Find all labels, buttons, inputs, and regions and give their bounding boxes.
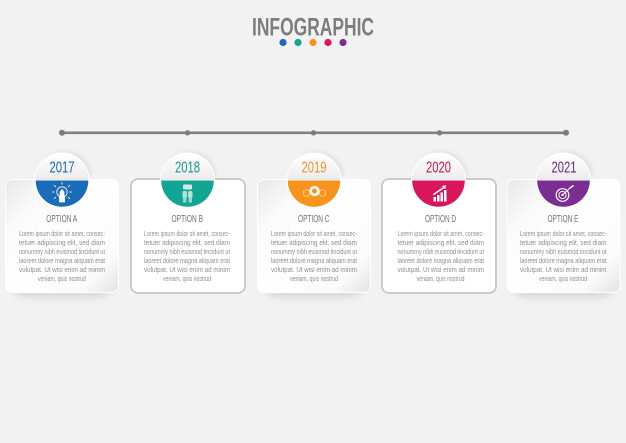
- icon: people: [182, 184, 192, 202]
- badge: 2018: 2018: [175, 160, 200, 176]
- badge: 2019: 2019: [302, 160, 326, 176]
- panel: option B: [131, 151, 245, 293]
- body text: [144, 229, 230, 283]
- body text: tetuer adipiscing elit, sed diam: [144, 238, 230, 247]
- body text: nonummy nibh euismod tincidunt ut: [19, 247, 105, 256]
- body text: nonummy nibh euismod tincidunt ut: [398, 247, 484, 256]
- body text: Lorem ipsum dolor sit amet, consec-: [271, 229, 357, 238]
- panel: option A: [6, 151, 118, 297]
- icon: target: [556, 186, 574, 201]
- body text: tetuer adipiscing elit, sed diam: [19, 238, 105, 247]
- body text: veniam, quis nostrud: [290, 274, 338, 283]
- body text: veniam, quis nostrud: [38, 274, 86, 283]
- body text: laoreet dolore magna aliquam erat: [144, 256, 230, 265]
- body text: laoreet dolore magna aliquam erat: [19, 256, 105, 265]
- body text: volutpat. Ut wisi enim ad minim: [144, 265, 230, 274]
- option label: OPTION B: [172, 214, 203, 225]
- icon: gears: [303, 187, 326, 196]
- badge: 2018: [160, 152, 215, 208]
- body text: [520, 229, 607, 283]
- title colour dots: [279, 39, 347, 46]
- body text: volutpat. Ut wisi enim ad minim: [398, 265, 484, 274]
- body text: volutpat. Ut wisi enim ad minim: [19, 265, 105, 274]
- option label: OPTION D: [425, 214, 456, 225]
- body text: veniam, quis nostrud: [163, 274, 211, 283]
- title: INFOGRAPHIC: [252, 14, 374, 42]
- panel: option D: [382, 151, 496, 293]
- body text: volutpat. Ut wisi enim ad minim: [520, 265, 606, 274]
- body text: laoreet dolore magna aliquam erat: [398, 256, 484, 265]
- body text: [19, 229, 105, 283]
- body text: Lorem ipsum dolor sit amet, consec-: [19, 229, 105, 238]
- badge: 2020: 2020: [426, 160, 451, 176]
- body text: [398, 229, 484, 283]
- body text: veniam, quis nostrud: [416, 274, 464, 283]
- badge: 2021: [536, 152, 591, 208]
- icon: bar chart: [433, 185, 446, 202]
- body text: tetuer adipiscing elit, sed diam: [398, 238, 484, 247]
- body text: [271, 229, 357, 283]
- body text: tetuer adipiscing elit, sed diam: [520, 238, 606, 247]
- body text: volutpat. Ut wisi enim ad minim: [271, 265, 357, 274]
- body text: Lorem ipsum dolor sit amet, consec-: [144, 229, 230, 238]
- body text: veniam, quis nostrud: [539, 274, 587, 283]
- option label: OPTION C: [298, 214, 330, 225]
- body text: Lorem ipsum dolor sit amet, consec-: [398, 229, 484, 238]
- option label: OPTION E: [548, 214, 579, 225]
- badge: 2019: [286, 152, 342, 208]
- timeline: [59, 130, 569, 136]
- icon: light bulb: [52, 182, 72, 202]
- option label: OPTION A: [46, 214, 78, 225]
- panel: option E: [507, 151, 620, 297]
- body text: nonummy nibh euismod tincidunt ut: [271, 247, 357, 256]
- badge: 2020: [411, 152, 466, 208]
- badge: 2017: 2017: [50, 160, 74, 176]
- body text: tetuer adipiscing elit, sed diam: [271, 238, 357, 247]
- badge: 2017: [34, 152, 90, 208]
- panel: option C: [258, 151, 370, 297]
- body text: nonummy nibh euismod tincidunt ut: [144, 247, 230, 256]
- body text: laoreet dolore magna aliquam erat: [271, 256, 357, 265]
- badge: 2021: 2021: [552, 160, 576, 176]
